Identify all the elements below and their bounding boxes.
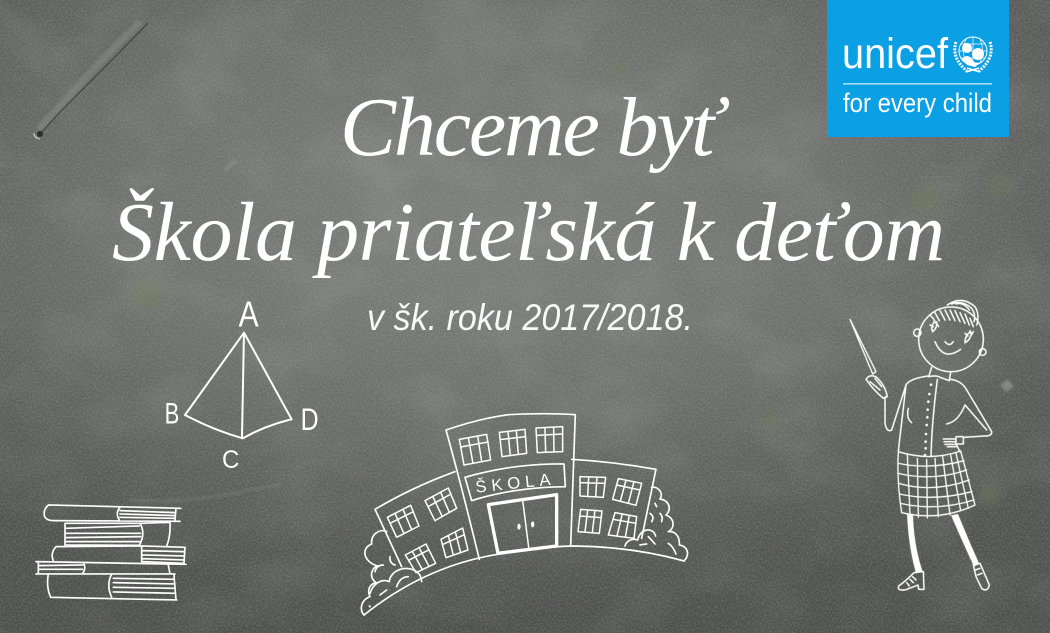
- head: [914, 300, 986, 372]
- logo: unicef for every child: [827, 0, 1009, 137]
- school sign: [465, 464, 565, 501]
- unicef wordmark: unicef: [842, 30, 949, 78]
- title line 2: Škola priateľská k deťom: [112, 186, 945, 279]
- vertex D: D: [301, 402, 319, 437]
- tagline: for every child: [843, 88, 992, 118]
- central block: [446, 414, 575, 559]
- vertex C: C: [222, 446, 239, 474]
- shoes: [898, 563, 989, 590]
- blouse: [866, 367, 992, 457]
- school sign: ŠKOLA: [474, 470, 552, 497]
- title: [112, 81, 945, 279]
- icon: stack of books: [36, 505, 186, 600]
- plaid skirt: [898, 451, 975, 518]
- icon: unicef emblem: [955, 37, 991, 72]
- buttons: [924, 383, 932, 456]
- door: [488, 495, 557, 553]
- icon: teacher with pointer: [850, 300, 992, 590]
- legs: [907, 514, 979, 573]
- vertex A: A: [239, 294, 259, 335]
- left wing: [375, 472, 455, 567]
- subtitle: v šk. roku 2017/2018.: [367, 297, 693, 338]
- bushes: [361, 531, 422, 615]
- pointer: [850, 319, 876, 374]
- icon: pyramid with labelled vertices: [165, 294, 319, 474]
- windows: [387, 427, 642, 573]
- icon: school building: [361, 414, 688, 615]
- ground curve: [364, 546, 684, 615]
- title line 1: Chceme byť: [340, 81, 729, 174]
- vertex B: B: [165, 397, 179, 430]
- right wing: [572, 459, 656, 538]
